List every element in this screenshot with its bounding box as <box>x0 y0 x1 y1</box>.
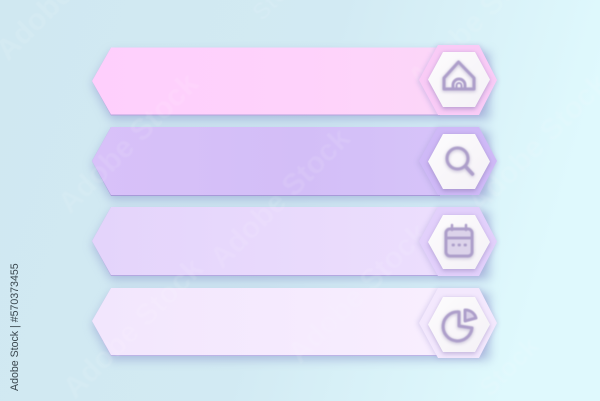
hexagon: calendar <box>417 207 498 278</box>
panel: pale lilac bar <box>92 288 440 356</box>
watermark: Adobe Stock <box>282 217 435 370</box>
panel: lavender bar <box>92 207 440 276</box>
panel: pink bar <box>92 48 440 116</box>
watermark: Adobe Stock <box>204 122 357 275</box>
panel: purple bar <box>92 127 440 196</box>
hexagon: home <box>417 45 498 117</box>
icon: calendar <box>446 225 472 257</box>
icon: pie chart <box>443 310 476 342</box>
watermark: Stock <box>473 331 545 401</box>
credit text: Adobe Stock | #570373455 <box>9 263 21 391</box>
watermark: Adobe Stock <box>52 67 205 220</box>
icon: house <box>444 62 474 90</box>
hexagon: search <box>417 127 498 197</box>
hexagon: pie chart <box>417 288 498 359</box>
watermark: Adobe Stock <box>57 252 210 401</box>
icon: magnifier <box>447 148 472 175</box>
bar shadows <box>92 52 490 360</box>
